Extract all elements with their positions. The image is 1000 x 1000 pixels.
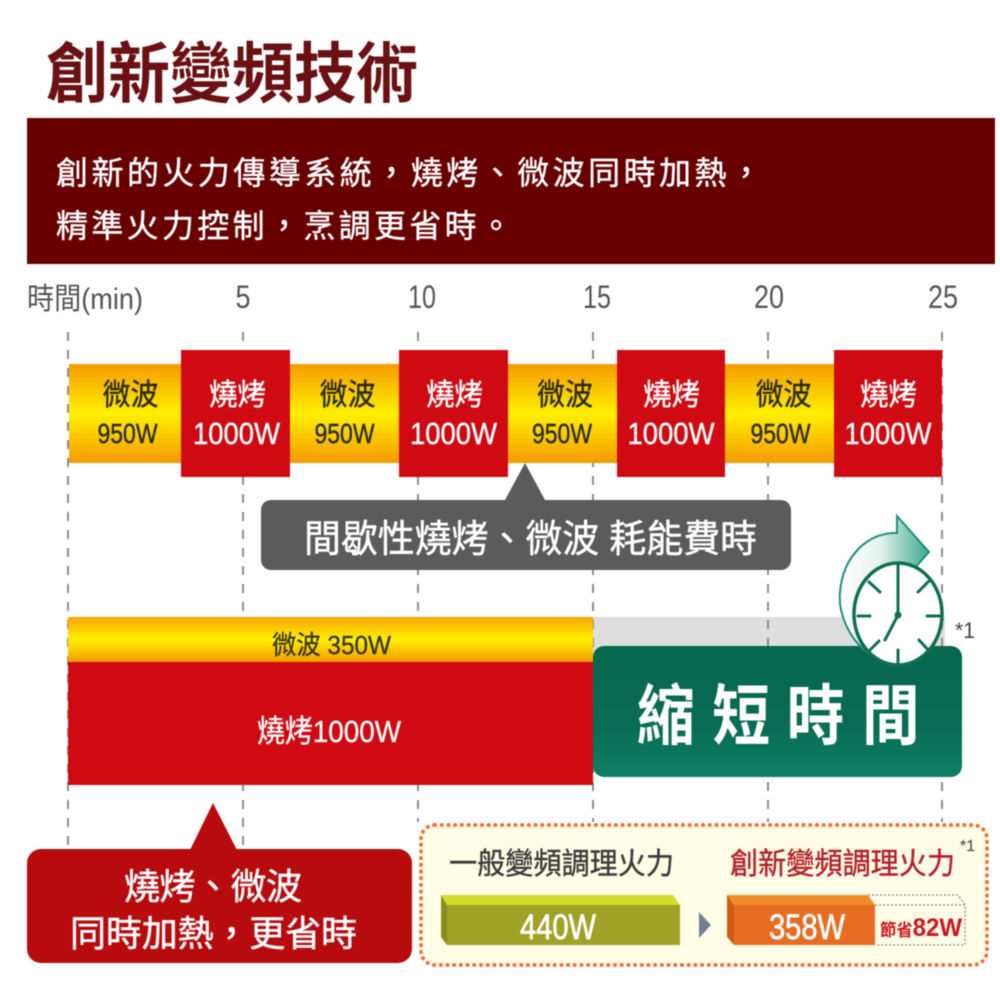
time grid lines: [68, 332, 942, 850]
panel: grill segments: [181, 350, 942, 477]
panel: microwave segment labels: 微波: [320, 379, 376, 412]
bar: 358W: [727, 895, 875, 947]
panel: intro banner: 創新的火力傳導系統，燒烤、微波同時加熱，: [56, 155, 762, 191]
panel: intro banner: 精準火力控制，烹調更省時。: [56, 208, 512, 244]
time axis labels: 時間(min): [27, 283, 143, 316]
panel: microwave segment labels: 微波: [102, 379, 158, 412]
callout: intermittent heating wastes time: 間歇性燒烤、微波 耗能費時: [304, 519, 757, 561]
panel: lower microwave bar track: [593, 617, 945, 661]
panel: microwave segment labels: 950W: [750, 418, 811, 449]
callout: simultaneous heating saves time: 燒烤、微波: [124, 866, 302, 907]
grill segment labels: 燒烤: [860, 379, 917, 412]
panel: microwave segment labels: 950W: [532, 418, 592, 449]
time axis labels: 20: [754, 279, 784, 315]
time axis labels: [27, 279, 958, 316]
time axis labels: 10: [408, 279, 436, 315]
footnote mark: *1: [960, 838, 975, 855]
bar: 440W: [441, 895, 680, 947]
time axis labels: 15: [583, 279, 611, 315]
panel: microwave segment labels: 950W: [314, 418, 375, 449]
grill segment labels: 1000W: [628, 416, 715, 451]
callout: simultaneous heating saves time: [27, 803, 412, 963]
grill segment labels: 1000W: [193, 416, 281, 451]
grill segment labels: 燒烤: [426, 379, 483, 412]
heading: innovative inverter: 創新變頻調理火力: [730, 848, 955, 881]
bar: 440W: 440W: [520, 908, 596, 947]
panel: intermittent microwave bar: [69, 364, 942, 463]
grill segment labels: 燒烤: [643, 379, 700, 412]
footnote mark: *1: [955, 618, 975, 643]
label: saved 82W: 節省82W: [880, 914, 962, 942]
callout: simultaneous heating saves time: 同時加熱，更省時: [70, 913, 357, 954]
panel: microwave segment labels: 微波: [537, 379, 593, 412]
chart: simultaneous heating bar: [68, 617, 593, 785]
panel: intro banner: [27, 118, 995, 264]
grill segment labels: 1000W: [410, 416, 498, 451]
panel: microwave segment labels: [98, 379, 812, 449]
panel: microwave segment labels: 950W: [98, 418, 158, 449]
panel: cooking power comparison: [421, 825, 987, 965]
time axis labels: 5: [236, 279, 250, 315]
grill segment labels: 燒烤: [209, 379, 266, 412]
panel: microwave segment labels: 微波: [756, 379, 812, 412]
icon: clock with arrow: [840, 516, 942, 665]
saved power outline: [868, 895, 965, 945]
arrow: [699, 912, 711, 938]
title: 創新變頻技術: [46, 37, 418, 111]
chart: simultaneous heating bar: 微波 350W: [272, 630, 391, 660]
callout: intermittent heating wastes time: [261, 463, 791, 570]
callout: shorter time: 縮短時間: [637, 680, 920, 754]
callout: shorter time: [593, 646, 962, 777]
grill segment labels: 1000W: [844, 416, 932, 451]
time axis labels: 25: [928, 279, 958, 315]
intermittent heating blocks: [98, 350, 942, 477]
bar: 358W: 358W: [769, 908, 845, 947]
grill segment labels: [193, 379, 932, 451]
heading: standard inverter: 一般變頻調理火力: [449, 848, 674, 881]
chart: simultaneous heating bar: 燒烤1000W: [257, 714, 402, 749]
